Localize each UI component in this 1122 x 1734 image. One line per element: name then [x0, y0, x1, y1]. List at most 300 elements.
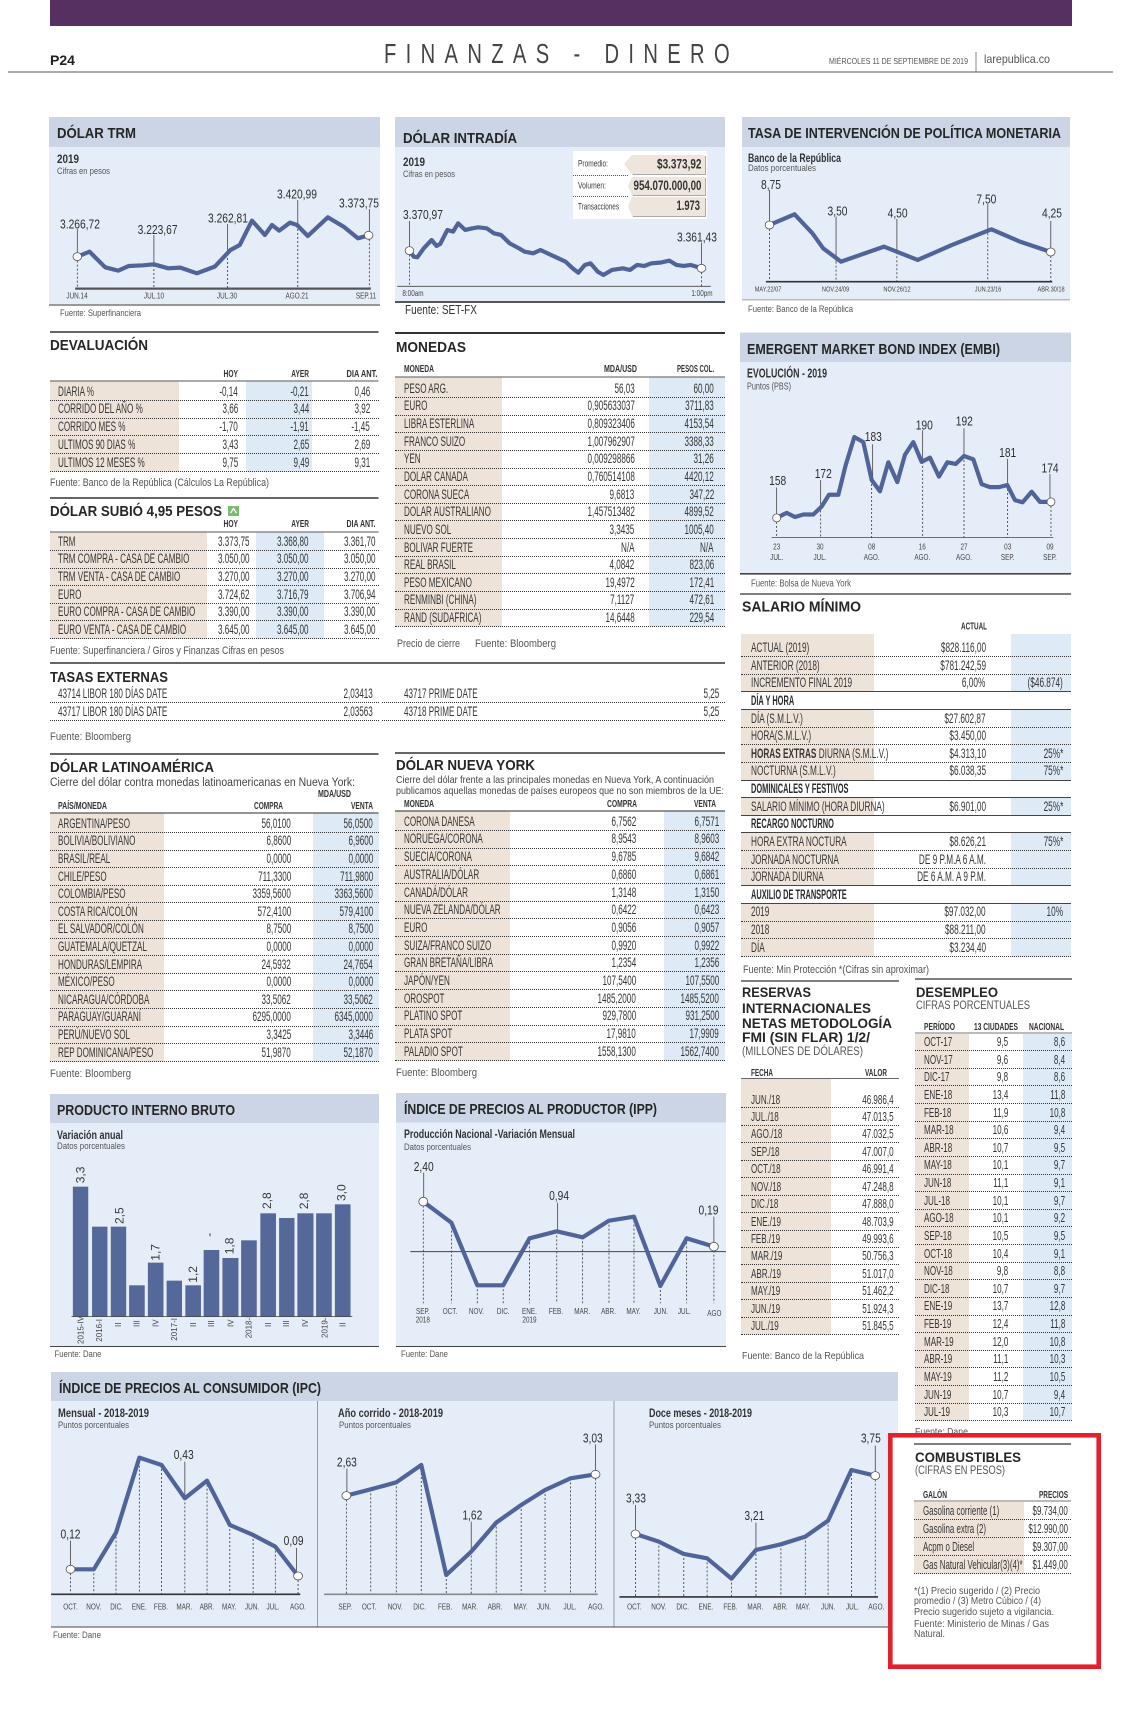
table: dólar: 3.270,00: [277, 569, 309, 584]
table: reservas: 51.462,2: [863, 1283, 894, 1298]
table: latinoamérica: 8,7500: [266, 921, 291, 936]
heading: COMBUSTIBLES: [915, 1450, 1021, 1465]
page number: P24: [50, 52, 75, 68]
bar chart: 3,0: [335, 1184, 349, 1201]
column headers: [224, 518, 376, 530]
line chart: JUL.: [770, 552, 783, 562]
table: reservas: DIC./18: [751, 1196, 778, 1211]
column headers: AYER: [291, 368, 309, 380]
table: dólar: 3.361,70: [344, 534, 376, 549]
table: latinoamérica: CHILE/PESO: [58, 869, 107, 884]
line chart: [769, 415, 1059, 562]
table: monedas: N/A: [700, 540, 714, 555]
table: monedas: 229,54: [689, 610, 714, 625]
table: dólar: 3.270,00: [344, 569, 376, 584]
table: prime: [382, 686, 725, 721]
table: nueva york: 107,5500: [685, 973, 719, 988]
subheading: Cifras en pesos: [57, 166, 110, 176]
chart: doce meses: MAY.: [796, 1601, 810, 1612]
table: reservas: OCT./18: [751, 1161, 781, 1176]
chart: doce meses: AGO.: [868, 1601, 884, 1612]
table: monedas: 14,6448: [605, 610, 634, 625]
line chart: JUL.30: [217, 291, 237, 301]
top purple band: [50, 0, 1072, 26]
table: salario: ($46.874): [1028, 675, 1063, 690]
source: Fuente: Dane: [401, 1349, 448, 1359]
chart: año corrido: MAR.: [462, 1601, 478, 1612]
table: salario: $828.116,00: [941, 640, 986, 655]
table: devaluación: -1,70: [220, 419, 238, 434]
table: desempleo: 10,3: [992, 1404, 1008, 1419]
line chart: 23: [773, 541, 780, 552]
source: Fuente: Superfinanciera: [60, 308, 141, 318]
line chart: 2,40: [414, 1161, 434, 1174]
line chart: AGO.: [956, 552, 972, 562]
source: Fuente: Min Protección *(Cifras sin aproximar): [743, 964, 929, 976]
table: desempleo: SEP-18: [924, 1228, 952, 1243]
chart: mensual: [51, 1406, 306, 1612]
table: devaluación: -1,91: [291, 419, 309, 434]
table: nueva york: 1562,7400: [681, 1044, 719, 1059]
table: monedas: PESO ARG.: [404, 381, 448, 396]
table: nueva york: 0,9922: [694, 938, 719, 953]
chart: doce meses: NOV.: [651, 1601, 666, 1612]
column headers: [404, 363, 714, 375]
table: devaluación: 3,92: [354, 401, 370, 416]
heading: FMI (SIN FLAR) 1/2/: [742, 1030, 870, 1045]
table: dólar: 3.390,00: [344, 604, 376, 619]
table: salario: HORAS EXTRAS DIURNA (S.M.L.V.): [751, 746, 888, 761]
bar chart: III: [133, 1320, 142, 1327]
line chart: AGO.: [864, 552, 880, 562]
table: salario: DE 9 P.M.A 6 A.M.: [919, 852, 986, 866]
subheading: [747, 366, 827, 392]
table: reservas: 46.991,4: [863, 1161, 894, 1176]
table: monedas: FRANCO SUIZO: [404, 434, 465, 449]
table: desempleo: 10,7: [992, 1281, 1008, 1296]
table: salario: 75%*: [1043, 763, 1063, 778]
table: reservas: MAR./19: [751, 1248, 782, 1263]
table: dólar: TRM: [58, 534, 76, 549]
table: libor: 43714 LIBOR 180 DÍAS DATE: [58, 686, 167, 701]
table: reservas: 47.013,5: [863, 1109, 894, 1124]
column headers: COMPRA: [254, 800, 283, 812]
table: nueva york: 17,9909: [690, 1026, 719, 1041]
table: reservas: ABR./19: [751, 1266, 781, 1281]
line chart: 192: [956, 415, 973, 429]
chart: doce meses: JUL.: [846, 1601, 859, 1612]
table: latinoamérica: 579,4100: [339, 904, 373, 919]
line chart: JUN.23/16: [975, 286, 1002, 294]
table: desempleo: ENE-18: [924, 1087, 952, 1102]
chart: año corrido: ABR.: [488, 1601, 503, 1612]
line chart: DIC.: [497, 1306, 510, 1316]
table: monedas: 172,41: [689, 575, 714, 590]
table: nueva york: 0,6861: [694, 867, 719, 882]
line chart: 3.266,72: [60, 218, 100, 232]
table: desempleo: OCT-18: [924, 1246, 952, 1260]
table: desempleo: [915, 1034, 1072, 1421]
line chart: AGO: [707, 1308, 722, 1318]
table: nueva york: [395, 812, 725, 1061]
chart: año corrido: DIC.: [413, 1601, 426, 1612]
table: desempleo: 8,6: [1054, 1069, 1065, 1084]
table: latinoamérica: 3363,5600: [335, 886, 373, 901]
line chart: 190: [916, 420, 933, 433]
table: devaluación: ULTIMOS 90 DIAS %: [58, 437, 135, 452]
table: latinoamérica: BRASIL/REAL: [58, 851, 110, 866]
line chart: 3.361,43: [677, 232, 717, 245]
table: latinoamérica: 711,3300: [258, 869, 291, 884]
table: salario: JORNADA NOCTURNA: [751, 852, 839, 866]
column headers: PESOS COL.: [677, 363, 714, 375]
line chart: OCT.: [443, 1306, 457, 1316]
table: dólar: TRM COMPRA - CASA DE CAMBIO: [58, 551, 189, 566]
panel: Tasas externas: [50, 662, 725, 743]
table: nueva york: 1485,5200: [681, 991, 719, 1006]
table: dólar: 3.270,00: [218, 569, 250, 584]
line chart: [410, 1161, 726, 1325]
table: latinoamérica: 56,0500: [344, 816, 373, 831]
table: combustibles: $1.449,00: [1033, 1557, 1068, 1572]
heading: DÓLAR TRM: [57, 124, 136, 142]
table: reservas: JUL./19: [751, 1318, 779, 1333]
table: salario: DÍA (S.M.L.V.): [751, 710, 803, 726]
column headers: PRECIOS: [1039, 1489, 1068, 1501]
table: salario: HORA EXTRA NOCTURA: [751, 834, 846, 849]
table: desempleo: 11,1: [993, 1351, 1008, 1366]
line chart: 1:00pm: [691, 288, 713, 298]
table: nueva york: 1485,2000: [598, 991, 636, 1006]
bar chart: [72, 1166, 352, 1344]
heading: TASAS EXTERNAS: [50, 669, 168, 686]
table: desempleo: 13,7: [992, 1298, 1008, 1313]
table: devaluación: 3,66: [222, 401, 238, 416]
table: desempleo: MAY-18: [924, 1157, 952, 1172]
table: monedas: 472,61: [689, 592, 714, 607]
table: reservas: 50.756,3: [863, 1248, 894, 1263]
description: [396, 774, 724, 797]
bar chart: II: [114, 1323, 123, 1327]
bar chart: II: [189, 1323, 198, 1327]
table: latinoamérica: 24,7654: [344, 957, 373, 972]
table: nueva york: 8,9603: [694, 831, 719, 846]
table: dólar: 3.706,94: [344, 587, 376, 602]
table: devaluación: 9,75: [222, 455, 238, 470]
chart: mensual: 0,09: [284, 1535, 304, 1548]
column headers: GALÓN: [923, 1488, 947, 1501]
table: latinoamérica: 33,5062: [344, 992, 373, 1007]
line chart: MAR.: [574, 1306, 590, 1316]
summary box: $3.373,92: [657, 156, 702, 171]
table: monedas: EURO: [404, 398, 427, 413]
chart: año corrido: [324, 1406, 604, 1612]
line chart: JUL.: [678, 1306, 691, 1316]
chart: doce meses: MAR.: [747, 1601, 763, 1612]
chart: mensual: DIC.: [110, 1601, 123, 1612]
table: desempleo: 9,8: [997, 1069, 1008, 1084]
chart: doce meses: 3,75: [861, 1432, 881, 1446]
chart: doce meses: JUN.: [821, 1601, 835, 1612]
summary box: Promedio:: [578, 159, 608, 170]
table: reservas: JUN./18: [751, 1092, 780, 1106]
table: monedas: 60,00: [694, 381, 714, 396]
table: nueva york: 107,5400: [602, 973, 636, 988]
line chart: JUN.14: [66, 291, 88, 301]
icon: up arrow: [228, 506, 239, 516]
table: salario: AUXILIO DE TRANSPORTE: [751, 887, 846, 902]
table: salario: $3.450,00: [949, 728, 986, 743]
column headers: VALOR: [865, 1067, 887, 1079]
table: salario: DÍA: [751, 940, 764, 955]
table: latinoamérica: PARAGUAY/GUARANÍ: [58, 1009, 141, 1024]
line chart: 8,75: [761, 179, 781, 192]
table: desempleo: JUN-19: [924, 1386, 951, 1402]
subheading: 2019: [57, 152, 79, 166]
line chart: JUL.10: [144, 291, 164, 301]
table: monedas: DOLAR CANADA: [404, 469, 468, 484]
line chart: 0,94: [549, 1190, 570, 1203]
line chart: 0,19: [699, 1204, 718, 1218]
table: desempleo: 13,4: [992, 1087, 1008, 1102]
chart: año corrido: FEB.: [438, 1601, 452, 1612]
heading: DEVALUACIÓN: [50, 336, 148, 354]
line chart: 08: [868, 541, 875, 552]
subheading: Cifras en pesos: [403, 169, 455, 179]
red frame: [890, 1435, 1099, 1667]
table: reservas: 51.845,5: [863, 1318, 894, 1333]
table: desempleo: AGO-18: [924, 1210, 954, 1225]
table: dólar: 3.645,00: [344, 622, 376, 637]
table: monedas: 56,03: [614, 381, 634, 396]
line chart: AGO.21: [285, 291, 309, 301]
table: latinoamérica: 6,9600: [348, 833, 373, 848]
table: devaluación: -0,21: [291, 384, 309, 399]
table: prime: 5,25: [703, 704, 719, 719]
table: monedas: BOLIVAR FUERTE: [404, 540, 473, 555]
subheading: [404, 1127, 575, 1152]
subheading: Producción Nacional -Variación Mensual: [404, 1127, 575, 1141]
table: latinoamérica: 52,1870: [344, 1045, 373, 1060]
table: latinoamérica: 0,0000: [348, 851, 373, 866]
column headers: [58, 788, 373, 812]
line chart: ABR.30/18: [1037, 286, 1065, 294]
table: dólar: EURO: [58, 587, 81, 602]
table: latinoamérica: 0,0000: [348, 939, 373, 954]
chart: mensual: 0,43: [174, 1449, 194, 1462]
bar chart: 1,2: [186, 1266, 200, 1283]
heading: DÓLAR INTRADÍA: [403, 129, 517, 147]
heading: DESEMPLEO: [916, 985, 998, 1000]
table: latinoamérica: 0,0000: [266, 939, 291, 954]
footnote: Natural.: [914, 1629, 945, 1640]
bar chart: 2,8: [260, 1192, 274, 1209]
column headers: MDA/USD: [604, 363, 637, 375]
heading: [742, 985, 892, 1045]
table: salario: 10%: [1047, 904, 1063, 919]
table: nueva york: 0,9057: [694, 920, 719, 935]
panel: Reservas internacionales: [741, 980, 899, 1362]
table: dólar: 3.716,79: [277, 587, 309, 602]
table: nueva york: GRAN BRETAÑA/LIBRA: [404, 955, 493, 970]
table: combustibles: [914, 1502, 1071, 1574]
subheading: Datos porcentuales: [748, 163, 816, 173]
table: devaluación: 9,31: [354, 455, 370, 470]
chart: mensual: OCT.: [63, 1601, 78, 1612]
table: desempleo: NOV-18: [924, 1263, 953, 1278]
panel: Desempleo: [915, 978, 1072, 1438]
line chart: 27: [960, 541, 968, 552]
line chart: JUN.: [654, 1306, 668, 1316]
chart: mensual: MAY.: [222, 1601, 236, 1612]
chart: mensual: JUL.: [266, 1601, 280, 1612]
table: salario: $88.211,00: [945, 922, 986, 937]
heading: DÓLAR SUBIÓ 4,95 PESOS: [50, 502, 222, 520]
table: nueva york: 0,9056: [611, 920, 636, 935]
table: nueva york: 0,6423: [694, 902, 719, 917]
table: salario: $8.626,21: [949, 834, 986, 849]
table: reservas: 47.888,0: [863, 1196, 894, 1211]
table: salario: HORA(S.M.L.V.): [751, 728, 811, 743]
source: Fuente: Banco de la República: [748, 304, 853, 314]
table: latinoamérica: EL SALVADOR/COLÓN: [58, 921, 144, 936]
table: devaluación: ULTIMOS 12 MESES %: [58, 455, 145, 470]
table: monedas: RENMINBI (CHINA): [404, 592, 476, 607]
table: desempleo: 10,1: [992, 1193, 1008, 1208]
panel: Producto interno bruto: [50, 1094, 379, 1359]
line chart: 4,25: [1042, 208, 1062, 221]
table: nueva york: 929,7800: [602, 1008, 636, 1023]
table: desempleo: 10,8: [1049, 1104, 1065, 1120]
table: desempleo: DIC-18: [924, 1281, 950, 1296]
heading: SALARIO MÍNIMO: [742, 598, 861, 615]
line chart: 30: [816, 541, 824, 552]
table: dólar: 3.050,00: [218, 551, 250, 566]
heading: PRODUCTO INTERNO BRUTO: [57, 1102, 235, 1119]
table: latinoamérica: 711,9800: [340, 869, 373, 884]
panel: Índice de precios al productor: [396, 1093, 726, 1359]
table: reservas: MAY./19: [751, 1283, 780, 1298]
table: nueva york: 17,9810: [607, 1026, 636, 1041]
source: Fuente: Superfinanciera / Giros y Finanzas Cifras en pesos: [50, 645, 284, 657]
line chart: 2019: [522, 1314, 537, 1325]
panel: Dólar Nueva York: [395, 752, 725, 1079]
chart: año corrido: JUL.: [563, 1601, 577, 1612]
table: desempleo: 11,8: [1050, 1316, 1065, 1331]
line chart: 3.223,67: [138, 224, 178, 237]
table: monedas: 4,0842: [610, 557, 634, 572]
column headers: MONEDA: [404, 363, 434, 375]
table: reservas: 48.703,9: [863, 1214, 894, 1229]
line chart: 2018: [416, 1314, 430, 1325]
table: desempleo: 9,4: [1054, 1122, 1065, 1137]
table: salario: RECARGO NOCTURNO: [751, 816, 834, 831]
table: monedas: 1,007962907: [587, 434, 634, 449]
table: monedas: [395, 378, 725, 627]
line chart: MAY.: [626, 1306, 641, 1316]
source: Fuente: Dane: [915, 1426, 968, 1438]
chart: mensual: AGO.: [290, 1601, 306, 1612]
bar chart: IV: [226, 1319, 235, 1327]
line chart: 172: [815, 468, 832, 481]
table: desempleo: 10,1: [992, 1157, 1008, 1172]
panel: EMBI: [740, 332, 1071, 590]
table: nueva york: 1,3150: [694, 885, 719, 900]
subheading: [403, 155, 455, 179]
table: salario: DOMINICALES Y FESTIVOS: [751, 781, 848, 796]
table: desempleo: 10,5: [992, 1228, 1008, 1243]
source: Fuente: Banco de la República (Cálculos La República): [50, 477, 269, 489]
table: latinoamérica: 6,8600: [266, 833, 291, 848]
table: libor: [50, 686, 379, 721]
column headers: [751, 1067, 887, 1079]
bar chart: 2019-I: [321, 1315, 330, 1338]
heading: TASA DE INTERVENCIÓN DE POLÍTICA MONETARIA: [748, 124, 1061, 142]
table: combustibles: Gas Natural Vehicular(3)(4)*: [923, 1557, 1023, 1572]
bar chart: II: [264, 1323, 273, 1327]
source: Fuente: Dane: [53, 1630, 101, 1640]
table: libor: 2,03563: [344, 704, 373, 719]
table: combustibles: $12.990,00: [1028, 1521, 1068, 1536]
table: desempleo: 9,7: [1054, 1281, 1065, 1296]
table: nueva york: SUIZA/FRANCO SUIZO: [404, 938, 491, 953]
table: monedas: 19,4972: [605, 575, 634, 590]
table: latinoamérica: MÉXICO/PESO: [58, 974, 115, 989]
line chart: SEP.: [1043, 552, 1057, 562]
chart: año corrido: AGO.: [588, 1601, 604, 1612]
table: salario: $6.038,35: [949, 763, 986, 778]
chart: mensual: ENE.: [132, 1601, 147, 1612]
bar chart: IV: [151, 1319, 160, 1327]
column headers: MONEDA: [404, 798, 434, 810]
table: nueva york: 1558,1300: [598, 1044, 636, 1059]
bar chart: III: [207, 1320, 216, 1327]
chart: doce meses: 3,21: [744, 1510, 764, 1523]
table: desempleo: 11,2: [993, 1369, 1008, 1384]
table: monedas: NUEVO SOL: [404, 522, 451, 537]
table: latinoamérica: BOLIVIA/BOLIVIANO: [58, 833, 135, 848]
chart: doce meses: [619, 1406, 884, 1612]
table: reservas: 46.986,4: [863, 1092, 894, 1106]
chart: doce meses: OCT.: [627, 1601, 642, 1612]
table: salario: 25%*: [1043, 746, 1063, 761]
bar chart: II: [338, 1323, 348, 1327]
table: reservas: 49.993,6: [863, 1231, 894, 1246]
table: prime: 5,25: [703, 686, 719, 701]
chart: año corrido: Año corrido - 2018-2019: [338, 1406, 443, 1420]
table: latinoamérica: 3,3425: [266, 1027, 291, 1042]
table: libor: 2,03413: [344, 686, 373, 701]
table: latinoamérica: [50, 813, 379, 1062]
chart: mensual: NOV.: [86, 1601, 101, 1612]
table: nueva york: 0,6860: [611, 867, 636, 882]
table: latinoamérica: GUATEMALA/QUETZAL: [58, 939, 147, 954]
table: reservas: FEB./19: [751, 1231, 780, 1246]
table: salario: NOCTURNA (S.M.L.V.): [751, 763, 835, 778]
table: desempleo: 10,8: [1049, 1334, 1065, 1349]
section title: FINANZAS - DINERO: [384, 38, 739, 69]
table: salario: 2019: [751, 904, 769, 919]
table: nueva york: EURO: [404, 920, 427, 935]
table: latinoamérica: 6295,0000: [253, 1009, 291, 1024]
table: dólar: 3.373,75: [218, 534, 250, 549]
chart: doce meses: ABR.: [773, 1601, 788, 1612]
heading: ÍNDICE DE PRECIOS AL CONSUMIDOR (IPC): [59, 1380, 321, 1397]
table: nueva york: JAPÓN/YEN: [404, 973, 450, 988]
table: nueva york: 0,6422: [611, 902, 636, 917]
table: desempleo: 11,1: [993, 1175, 1008, 1190]
chart: doce meses: DIC.: [676, 1601, 689, 1612]
